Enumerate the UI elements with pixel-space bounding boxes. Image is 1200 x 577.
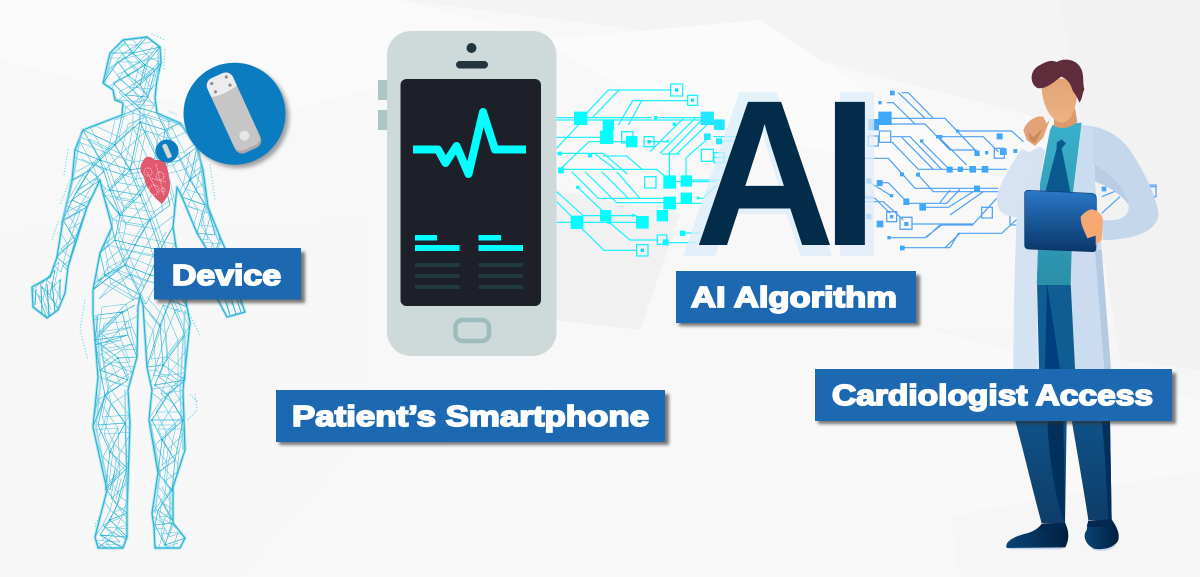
hand at chin [1023,116,1050,146]
label: Cardiologist Access: Cardiologist Access [832,380,1153,412]
large device badge [184,63,289,168]
doctor legs and shoes [1006,420,1119,551]
side buttons [378,80,387,130]
AI ghost text: A [678,41,838,307]
label: Device: Device [172,260,281,292]
mesh lines [38,37,240,548]
hand on tablet [1081,209,1103,245]
label: Cardiologist Access [815,369,1176,424]
phone camera and speaker [466,43,476,53]
label: Device [154,248,305,303]
AI ghost text: I [824,42,890,307]
doctor [997,60,1158,551]
coat left panel [1013,147,1045,400]
human body wireframe [31,29,246,557]
dense mesh layers [31,29,246,557]
body outline [32,37,245,548]
shirt [1037,123,1082,285]
AI heading: I [821,58,879,290]
doctor trousers upper [1022,283,1110,421]
coat right panel [1071,125,1113,400]
tie [1045,139,1071,193]
coat left arm [997,148,1037,217]
doctor upper body [997,60,1158,400]
hair [1032,60,1084,103]
heart [140,157,170,204]
neck [1054,108,1077,128]
screen data bars [415,235,523,251]
small device badge [156,140,178,162]
blue circuit [860,93,1157,248]
cyan circuit [557,90,747,250]
hand finger lines [35,280,241,316]
AI heading: A [694,56,835,289]
face [1042,79,1077,123]
heartbeat line [413,112,526,174]
home button [456,320,489,341]
label: Patient's Smartphone: Patient’s Smartphone [292,401,649,433]
device patch icon [204,70,264,156]
blue circuit nodes [866,91,1156,250]
coat right sleeve [1082,125,1158,240]
particle speckles [52,34,215,535]
tablet [1025,190,1096,252]
label: Patient's Smartphone [276,390,669,445]
phone [378,31,556,356]
cyan circuit nodes [558,84,725,256]
phone screen [400,79,541,306]
label: AI Algorithm: AI Algorithm [691,282,897,314]
mesh nodes [95,53,190,545]
label: AI Algorithm [676,271,920,326]
